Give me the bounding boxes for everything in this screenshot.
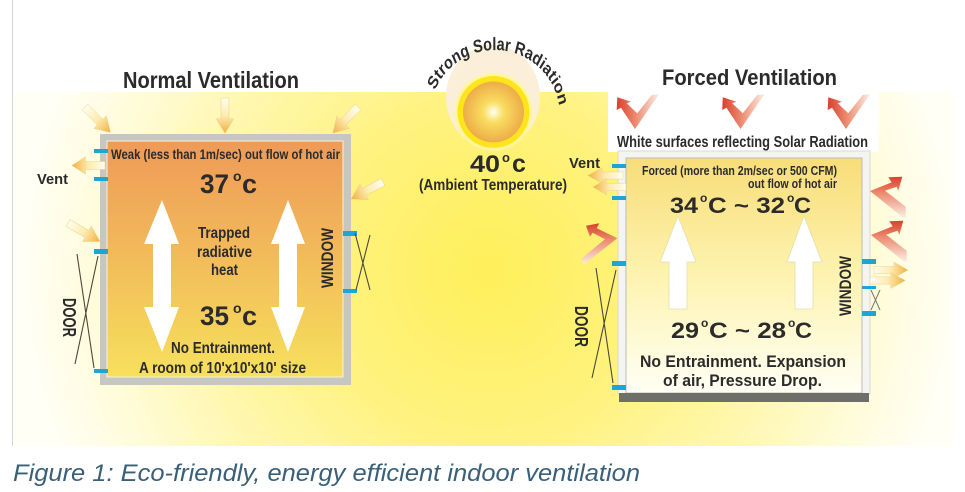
reflection notes: White surfaces reflecting Solar Radiation xyxy=(617,134,868,151)
ambient temperature: o xyxy=(502,150,510,165)
top temperature range: o xyxy=(700,191,707,205)
yellow heat background xyxy=(13,92,953,446)
panel: normal ventilation room xyxy=(100,134,351,385)
top temperature range: o xyxy=(787,191,794,205)
door, forced room: DOOR xyxy=(571,306,591,347)
vent label, forced room: Vent xyxy=(569,156,600,172)
window outflow arrows, forced room xyxy=(870,262,908,288)
room note xyxy=(139,340,306,377)
trapped heat label: heat xyxy=(211,262,239,279)
vent outflow arrows, forced room xyxy=(588,168,626,195)
top temperature range: C xyxy=(794,193,811,218)
flow note xyxy=(642,164,837,191)
white reflecting panel xyxy=(608,92,879,152)
door, forced room xyxy=(571,164,626,390)
figure caption: Figure 1: Eco-friendly, energy efficient indoor ventilation xyxy=(13,460,640,487)
trapped heat label: radiative xyxy=(197,244,252,261)
room note: No Entrainment. xyxy=(171,340,275,357)
panel: forced ventilation room xyxy=(618,151,870,402)
top temperature: 37 xyxy=(200,169,229,199)
sun with solar radiation label: Strong Solar Radiation xyxy=(428,37,566,105)
bottom temperature range xyxy=(671,316,812,343)
ambient temperature: (Ambient Temperature) xyxy=(419,177,567,194)
door, normal room xyxy=(59,149,108,373)
ambient temperature xyxy=(419,150,567,194)
vent outflow arrow, normal room xyxy=(72,157,105,174)
room note: A room of 10'x10'x10' size xyxy=(139,360,306,377)
bottom temperature range: C xyxy=(795,318,812,343)
reflected arrow, left wall xyxy=(582,223,617,265)
reflected arrows on roof xyxy=(617,94,870,129)
up arrow left xyxy=(660,216,696,309)
bottom temperature range: 29 xyxy=(671,318,699,343)
heading: normal ventilation: Normal Ventilation xyxy=(123,67,299,93)
window, forced room xyxy=(837,256,880,316)
sun with solar radiation label xyxy=(428,37,566,151)
trapped heat label xyxy=(197,225,252,279)
heading: forced ventilation: Forced Ventilation xyxy=(662,65,837,90)
double arrow left xyxy=(144,200,179,352)
reflected arrows, right wall xyxy=(870,177,907,262)
top temperature range xyxy=(670,191,811,218)
flow note: Forced (more than 2m/sec or 500 CFM) xyxy=(642,164,837,178)
window, forced room: WINDOW xyxy=(837,256,855,316)
bottom temperature: o xyxy=(233,300,242,316)
door, normal room: DOOR xyxy=(59,298,79,337)
bottom temperature xyxy=(200,300,257,331)
bottom temperature: 35 xyxy=(200,301,229,331)
window, normal room xyxy=(319,228,370,293)
flow note: Weak (less than 1m/sec) out flow of hot air xyxy=(111,147,341,162)
bottom temperature: c xyxy=(242,301,257,331)
up arrow right xyxy=(787,216,822,309)
room note: No Entrainment. Expansion xyxy=(640,352,846,371)
ambient temperature: c xyxy=(512,150,526,178)
window, normal room: WINDOW xyxy=(319,228,337,288)
room note xyxy=(640,352,846,390)
top temperature range: C ~ 32 xyxy=(708,193,785,218)
room note: of air, Pressure Drop. xyxy=(663,371,822,390)
top temperature: o xyxy=(233,168,242,184)
bottom temperature range: C ~ 28 xyxy=(709,318,786,343)
top temperature xyxy=(200,168,257,199)
left room incoming solar arrows xyxy=(64,98,387,249)
left margin rule xyxy=(12,0,13,446)
trapped heat label: Trapped xyxy=(198,225,250,242)
double arrow right xyxy=(271,200,305,352)
top temperature range: 34 xyxy=(670,193,699,218)
top temperature: c xyxy=(242,169,257,199)
ambient temperature: 40 xyxy=(470,151,500,178)
bottom temperature range: o xyxy=(701,316,708,330)
bottom temperature range: o xyxy=(788,316,795,330)
flow note: out flow of hot air xyxy=(748,177,837,191)
vent label, normal room: Vent xyxy=(37,172,68,188)
